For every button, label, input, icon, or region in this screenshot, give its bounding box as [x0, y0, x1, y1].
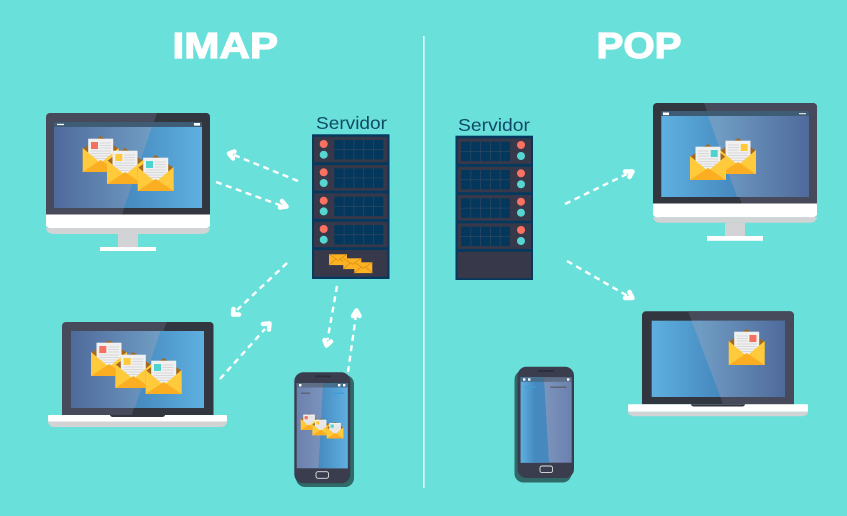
email 1 — [91, 340, 127, 376]
arrow: desktop to server — [216, 182, 286, 208]
IMAP server — [312, 113, 390, 279]
title: IMAP: IMAP — [172, 25, 278, 66]
arrow: POP server to laptop — [567, 261, 632, 298]
POP desktop monitor with two emails — [653, 103, 817, 241]
server rack — [456, 136, 533, 280]
IMAP laptop with three emails — [48, 322, 227, 427]
email 1 — [83, 136, 119, 172]
arrow: laptop to server — [220, 324, 270, 379]
POP server — [456, 115, 533, 280]
arrow: server to laptop — [233, 263, 287, 314]
title: POP: POP — [596, 25, 682, 66]
email 2 — [312, 418, 329, 435]
email 2 — [107, 148, 143, 184]
email 3 — [327, 422, 343, 438]
email front — [690, 144, 726, 180]
email 2 — [115, 352, 151, 388]
label: Servidor: Servidor — [316, 113, 387, 133]
email 3 — [146, 358, 182, 394]
label: Servidor: Servidor — [458, 115, 530, 135]
email 1 — [301, 413, 317, 430]
IMAP phone with three emails — [294, 372, 354, 487]
POP phone without emails — [514, 367, 574, 482]
arrow: POP server to desktop — [565, 172, 632, 204]
arrow: phone to server — [348, 310, 360, 372]
arrow: server to desktop — [229, 152, 298, 181]
POP laptop with one email — [628, 311, 808, 416]
email 3 — [138, 155, 174, 191]
divider line — [423, 36, 424, 488]
IMAP desktop monitor with three emails — [46, 113, 210, 251]
arrow: server to phone — [324, 286, 337, 346]
stored emails — [329, 254, 372, 273]
server rack — [312, 134, 390, 279]
email — [729, 329, 765, 365]
email back — [720, 138, 756, 174]
